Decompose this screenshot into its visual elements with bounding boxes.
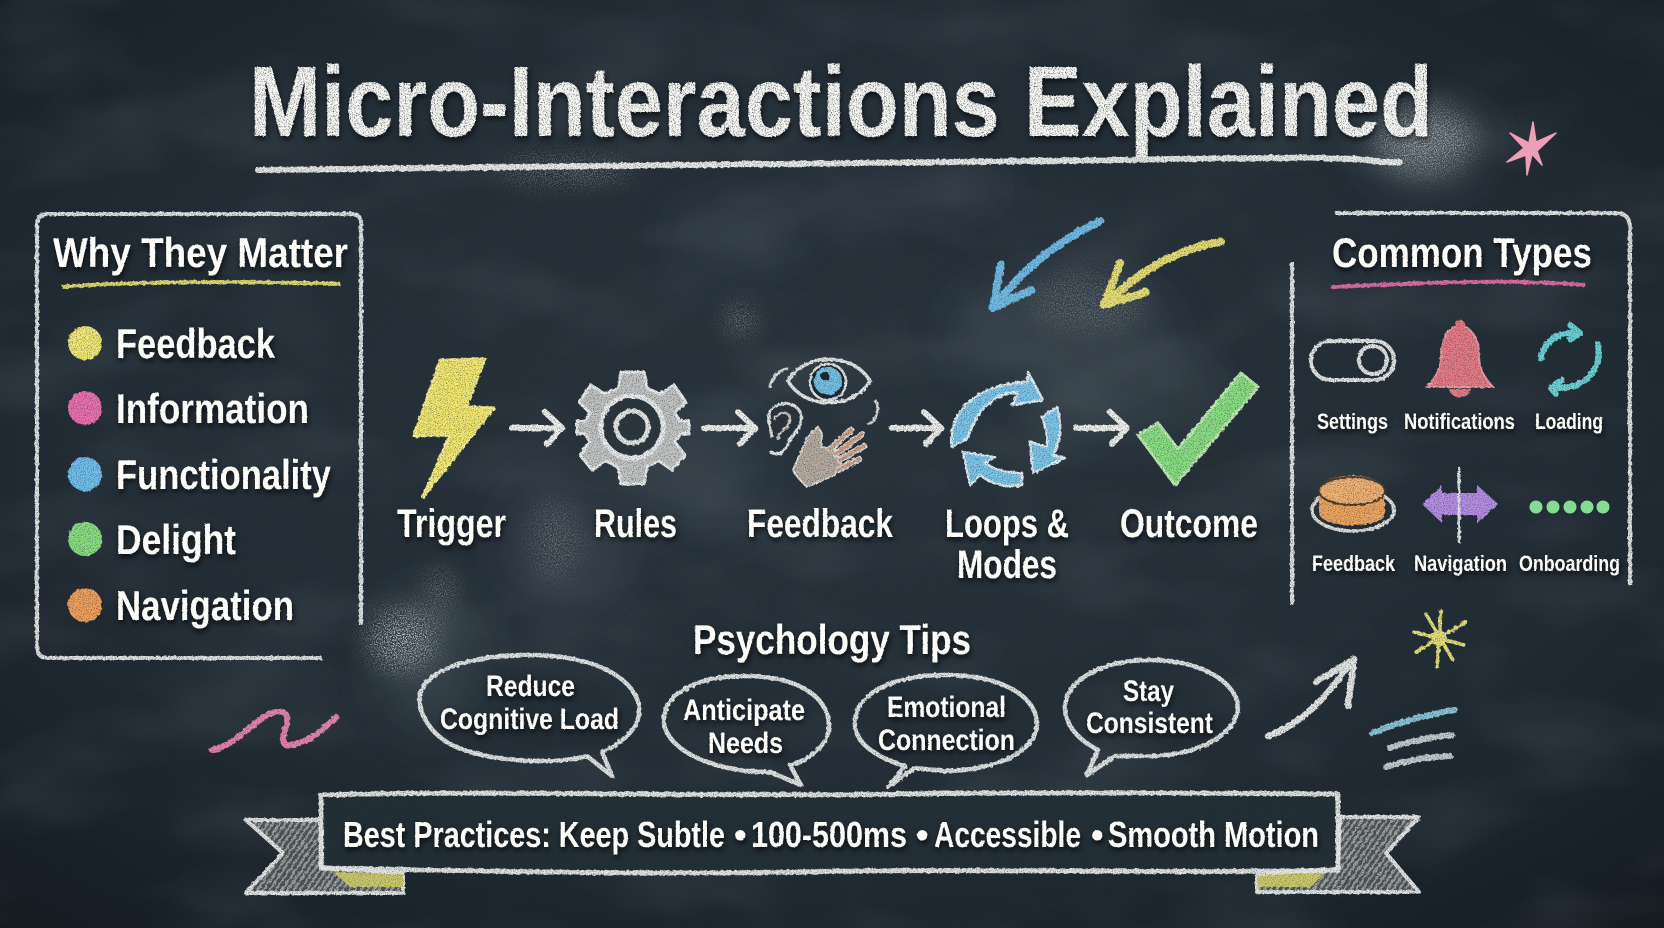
banner left tail bbox=[246, 820, 403, 893]
panel frame bbox=[1292, 213, 1630, 605]
item: feedback bbox=[68, 320, 276, 367]
item: delight bbox=[68, 516, 236, 563]
panel: common types bbox=[1292, 213, 1630, 605]
type: settings bbox=[1311, 341, 1394, 434]
panel frame bbox=[37, 214, 361, 658]
banner text: • bbox=[916, 814, 929, 855]
type: notifications bbox=[1404, 320, 1515, 434]
banner text: Accessible bbox=[934, 814, 1081, 855]
type: onboarding: Onboarding bbox=[1519, 551, 1620, 576]
icon: eye, ear and hand bbox=[769, 359, 878, 487]
arrow: feedback to loops bbox=[892, 412, 941, 444]
decoration: pink star bbox=[1507, 122, 1556, 175]
decoration: pink squiggle bbox=[212, 712, 336, 750]
banner main panel bbox=[321, 793, 1338, 873]
item: information bbox=[68, 385, 309, 432]
icon: lightning bolt bbox=[414, 359, 494, 497]
item: navigation: Navigation bbox=[116, 582, 294, 629]
banner text: Best Practices: Keep Subtle bbox=[343, 814, 725, 855]
arrow: trigger to rules bbox=[512, 412, 562, 444]
type: loading bbox=[1535, 325, 1603, 434]
icon: loop arrows bbox=[952, 372, 1065, 486]
item: functionality bbox=[68, 451, 332, 498]
section heading: Psychology Tips bbox=[693, 616, 971, 663]
speech bubble: reduce cognitive load: Reduce bbox=[486, 670, 575, 703]
panel heading: Why They Matter bbox=[53, 229, 348, 276]
type: feedback button: Feedback bbox=[1312, 551, 1396, 576]
type: onboarding bbox=[1519, 500, 1620, 576]
step label: loops and modes: Loops & bbox=[945, 502, 1069, 546]
type: feedback button bbox=[1312, 476, 1396, 576]
banner text bbox=[343, 814, 1319, 855]
banner text: 100-500ms bbox=[751, 814, 907, 855]
step label: feedback: Feedback bbox=[747, 502, 894, 546]
speech bubble: emotional connection: Emotional bbox=[887, 691, 1006, 724]
item: navigation bbox=[68, 582, 294, 629]
decoration: yellow star bbox=[1414, 611, 1466, 667]
decoration: chalk dashes bbox=[1372, 710, 1455, 767]
heading underline bbox=[1331, 282, 1585, 287]
icon: gear bbox=[577, 372, 689, 484]
section: psychology tips bbox=[419, 616, 1238, 787]
banner right tail bbox=[1257, 817, 1419, 892]
type: loading: Loading bbox=[1535, 409, 1603, 434]
speech bubble: reduce cognitive load: Cognitive Load bbox=[440, 703, 619, 736]
item: delight: Delight bbox=[116, 516, 236, 563]
speech bubble: anticipate needs: Anticipate bbox=[683, 694, 805, 727]
list: reasons bbox=[68, 320, 332, 629]
type: notifications: Notifications bbox=[1404, 409, 1515, 434]
arrow: yellow chalk bbox=[1104, 242, 1221, 305]
step label: loops and modes: Modes bbox=[957, 543, 1057, 587]
banner text: • bbox=[1091, 814, 1104, 855]
type: settings: Settings bbox=[1317, 409, 1388, 434]
speech bubble: stay consistent: Stay bbox=[1123, 675, 1174, 708]
speech bubble: stay consistent bbox=[1065, 660, 1238, 775]
step label: trigger: Trigger bbox=[397, 502, 506, 546]
type: navigation: Navigation bbox=[1414, 551, 1507, 576]
title: Micro-Interactions Explained bbox=[249, 46, 1433, 158]
banner text: Smooth Motion bbox=[1108, 814, 1319, 855]
speech bubble: reduce cognitive load bbox=[419, 655, 639, 776]
banner: best practices bbox=[246, 793, 1419, 893]
arrow: white rising bbox=[1268, 659, 1354, 736]
banner text: • bbox=[734, 814, 747, 855]
icon: checkmark bbox=[1138, 373, 1258, 485]
item: information: Information bbox=[116, 385, 309, 432]
arrow: blue chalk bbox=[993, 221, 1100, 308]
item: feedback: Feedback bbox=[116, 320, 276, 367]
item: functionality: Functionality bbox=[116, 451, 332, 498]
panel heading: Common Types bbox=[1332, 229, 1592, 276]
step label: loops and modes bbox=[945, 502, 1069, 587]
speech bubble: anticipate needs: Needs bbox=[708, 727, 783, 760]
banner folds bbox=[333, 870, 1328, 887]
step label: outcome: Outcome bbox=[1120, 502, 1258, 546]
heading underline bbox=[62, 282, 340, 287]
panel: why they matter bbox=[37, 214, 361, 658]
arrow: loops to outcome bbox=[1076, 412, 1127, 444]
step label: rules: Rules bbox=[594, 502, 677, 546]
flow: micro-interaction steps bbox=[397, 359, 1258, 587]
type: navigation bbox=[1414, 467, 1507, 576]
arrow: rules to feedback bbox=[704, 412, 755, 444]
speech bubble: anticipate needs bbox=[664, 676, 829, 785]
speech bubble: stay consistent: Consistent bbox=[1086, 707, 1213, 740]
speech bubble: emotional connection bbox=[855, 675, 1037, 787]
title underline bbox=[258, 158, 1400, 170]
speech bubble: emotional connection: Connection bbox=[878, 724, 1015, 757]
